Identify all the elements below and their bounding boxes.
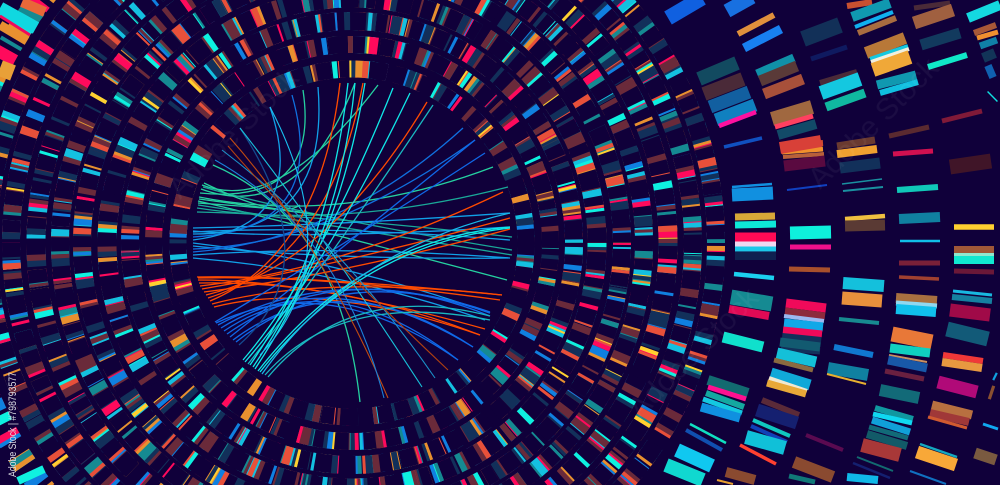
chord bundle: cyan bbox=[243, 83, 510, 377]
chord bundle: blue bbox=[193, 87, 510, 320]
chord bundle: green bbox=[197, 83, 512, 402]
outer ring, left corners bbox=[0, 0, 56, 485]
column r=403 bbox=[666, 0, 776, 480]
ring 9 bbox=[0, 0, 716, 485]
ring 6 bbox=[60, 0, 644, 485]
ring 3 bbox=[130, 21, 574, 465]
stock id text: Adobe Stock | #798793577 bbox=[7, 372, 19, 477]
chord arcs: top-left to bottom bbox=[215, 107, 448, 398]
chord bundle: orange bbox=[197, 83, 510, 335]
column r=622 bbox=[910, 3, 1000, 484]
chord bundle: deep blue bbox=[215, 128, 490, 360]
column r=512 bbox=[789, 25, 885, 482]
ring 5 bbox=[82, 0, 622, 485]
watermark: Adobe Stock bbox=[802, 51, 946, 195]
corner blocks, left bbox=[0, 2, 45, 481]
ring 1 bbox=[178, 69, 526, 417]
ring 2 bbox=[154, 44, 550, 442]
concentric data rings bbox=[0, 0, 747, 485]
ring 4 bbox=[107, 0, 597, 485]
column r=458 bbox=[717, 15, 831, 484]
watermark bbox=[162, 51, 946, 425]
outer right data blocks bbox=[666, 0, 1000, 484]
watermark: Adobe Stock bbox=[162, 61, 306, 205]
ring 8 bbox=[11, 0, 693, 485]
ring 7 bbox=[36, 0, 668, 485]
column r=567 bbox=[847, 2, 940, 480]
watermark: Adobe Stock bbox=[622, 281, 766, 425]
